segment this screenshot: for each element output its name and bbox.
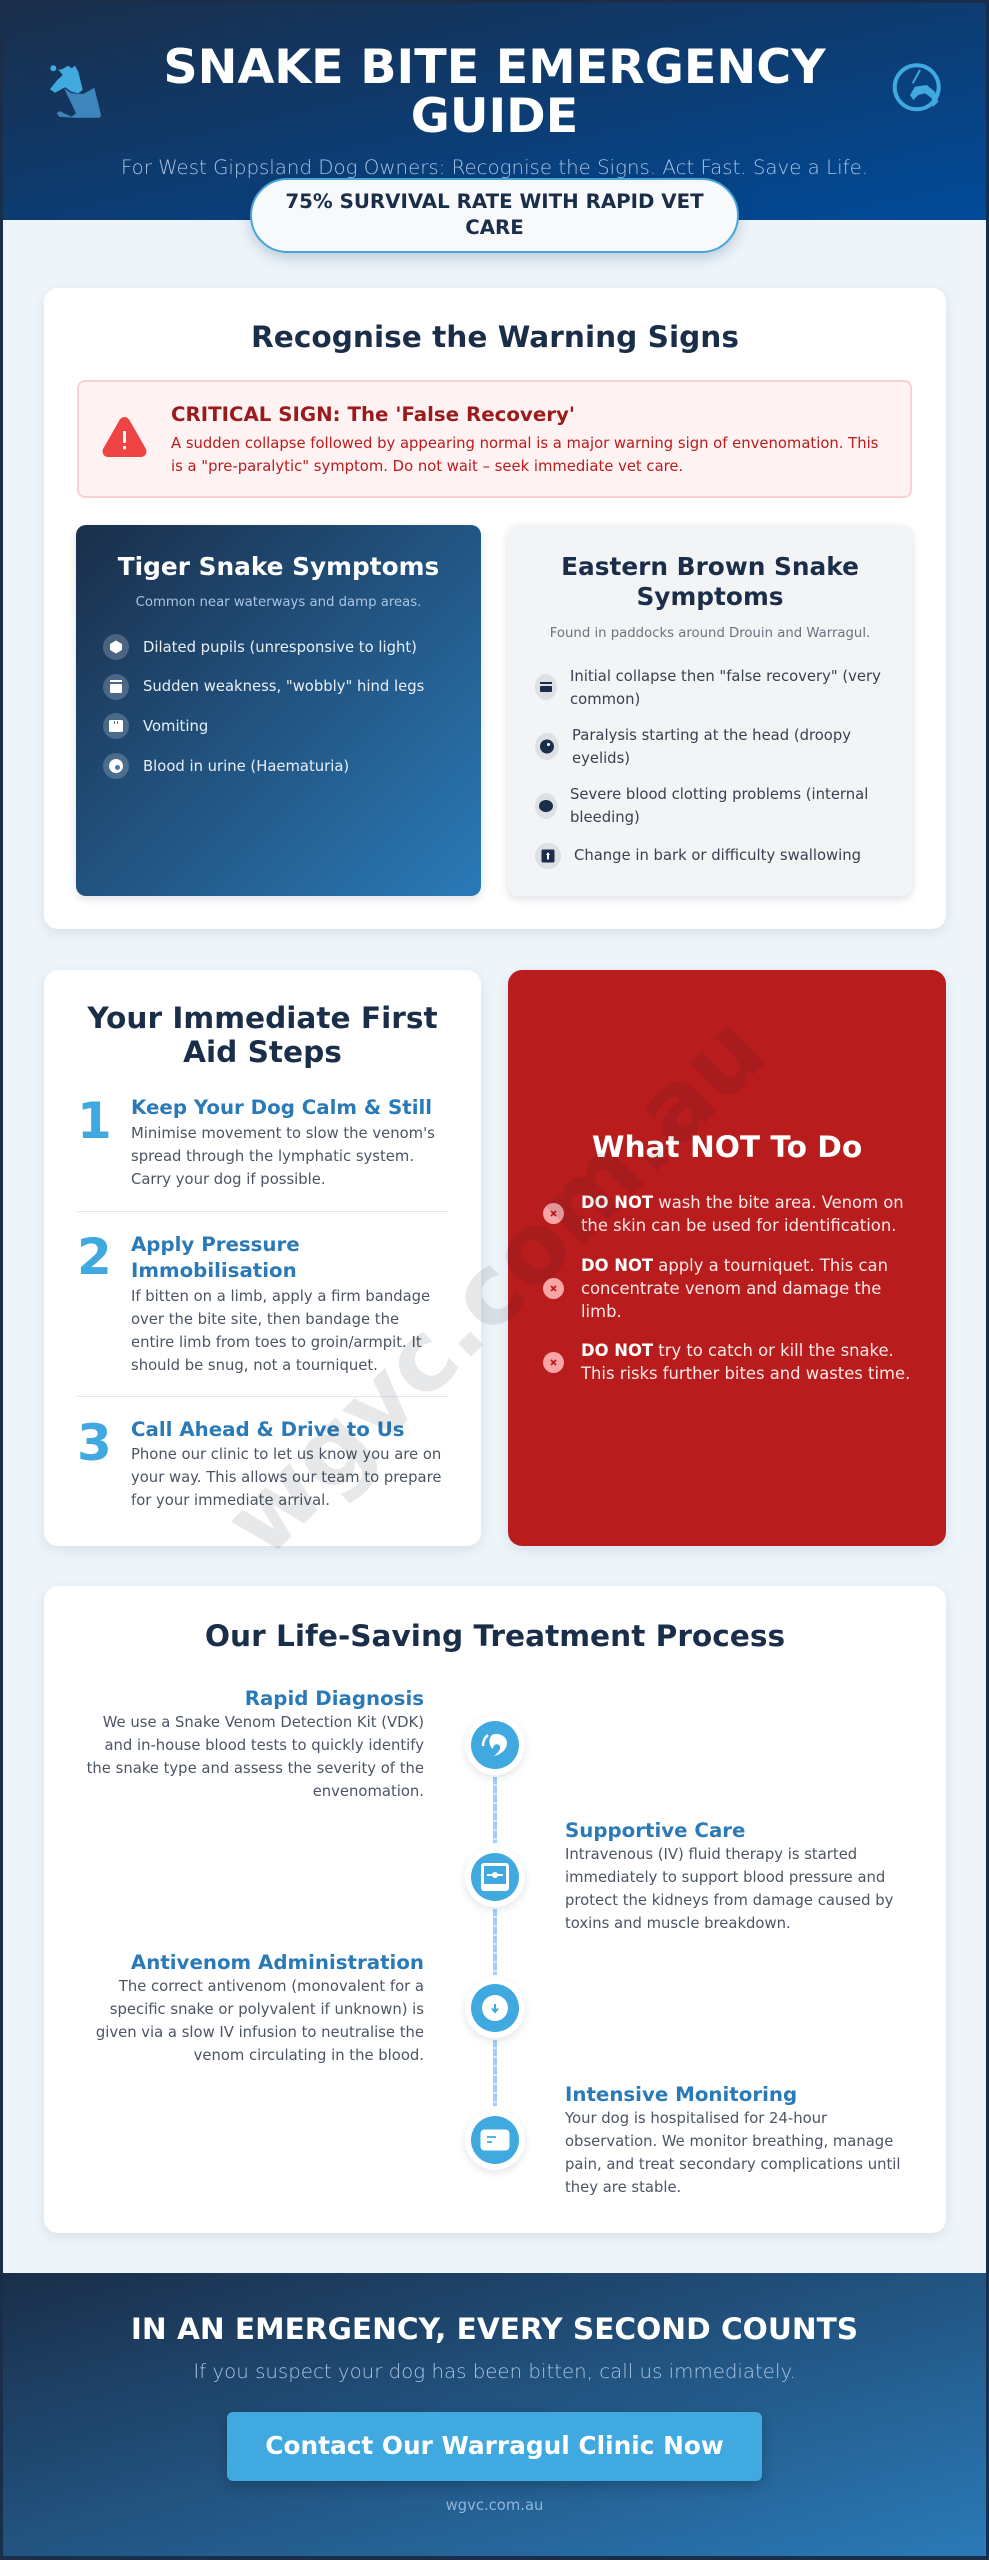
warning 2 text: concentrate venom and damage the [581, 1278, 881, 1298]
brown heading [561, 552, 859, 611]
step 3 text: Phone our clinic to let us know you are on [131, 1446, 441, 1463]
symptom text: clotting: Severe blood clotting problems (internal [570, 786, 868, 803]
rapid diagnosis text: the snake type and assess the severity of the [87, 1760, 424, 1777]
step: rapid diagnosis [87, 1687, 424, 1800]
heading: first aid: Your Immediate First [87, 1001, 438, 1035]
website: wgvc.com.au [446, 2497, 543, 2514]
main title [163, 40, 826, 144]
supportive care text [565, 1846, 893, 1932]
rapid diagnosis text [87, 1714, 424, 1800]
step 2 text: entire limb from toes to groin/armpit. It [131, 1334, 422, 1351]
step 3 heading: Call Ahead & Drive to Us [131, 1418, 405, 1441]
callout: false recovery [77, 380, 912, 498]
callout text: A sudden collapse followed by appearing normal is a major warning sign of envenomation. This [171, 434, 878, 452]
step 1 text: Carry your dog if possible. [131, 1171, 326, 1188]
antivenom text: given via a slow IV infusion to neutralise the [96, 2024, 424, 2041]
step 1 [77, 1092, 435, 1188]
page background [3, 220, 986, 2273]
antivenom text: specific snake or polyvalent if unknown) is [110, 2001, 424, 2018]
supportive care heading: Supportive Care [565, 1819, 745, 1842]
warning 3 text [580, 1340, 910, 1382]
panel: what not to do [508, 970, 946, 1546]
step number 1: 1 [77, 1092, 112, 1150]
intensive monitoring text: they are stable. [565, 2179, 681, 2196]
icon: cross 2 [543, 1278, 564, 1299]
symptom text: bark: Change in bark or difficulty swallowing [574, 847, 861, 864]
symptom icon: bark [535, 843, 561, 869]
symptom text: paralysis: Paralysis starting at the head (droopy [572, 727, 851, 744]
heading: what not to do: What NOT To Do [592, 1130, 862, 1164]
symptom text: paralysis [572, 727, 851, 767]
warning 2 text: limb. [581, 1302, 622, 1320]
symptom text: pupils: Dilated pupils (unresponsive to light) [143, 638, 417, 656]
step 2 text [131, 1288, 430, 1374]
main title: SNAKE BITE EMERGENCY [163, 40, 826, 95]
step 1 heading: Keep Your Dog Calm & Still [131, 1096, 432, 1118]
symptom text: collapse [570, 668, 881, 708]
icon: dog [50, 65, 101, 118]
step 1 text [131, 1125, 435, 1188]
intensive monitoring heading: Intensive Monitoring [565, 2083, 797, 2106]
callout title: CRITICAL SIGN: The 'False Recovery' [171, 403, 575, 426]
supportive care text: immediately to support blood pressure and [565, 1869, 885, 1886]
symptom text: clotting: bleeding) [570, 809, 640, 826]
symptom text: vomiting: Vomiting [143, 718, 208, 735]
warning 2 text [581, 1256, 888, 1320]
intensive monitoring text: observation. We monitor breathing, manage [565, 2133, 893, 2150]
rapid diagnosis text: envenomation. [313, 1783, 424, 1800]
supportive care text: toxins and muscle breakdown. [565, 1915, 791, 1932]
intensive monitoring text: Your dog is hospitalised for 24-hour [565, 2110, 827, 2127]
rapid diagnosis heading: Rapid Diagnosis [245, 1687, 424, 1710]
symptom text: clotting [570, 786, 868, 826]
step number 3: 3 [77, 1414, 112, 1472]
panel: first aid steps [44, 970, 481, 1546]
warning 1 text [581, 1192, 904, 1234]
warning 3 text: This risks further bites and wastes time. [581, 1364, 910, 1382]
step: intensive monitoring [565, 2083, 900, 2196]
callout text: is a "pre-paralytic" symptom. Do not wait – seek immediate vet care. [171, 458, 683, 474]
heading: first aid [87, 1001, 438, 1068]
step 2 heading: Immobilisation [131, 1259, 297, 1282]
intensive monitoring text: pain, and treat secondary complications until [565, 2156, 900, 2173]
footer text: If you suspect your dog has been bitten, call us immediately. [193, 2360, 796, 2383]
step 3 text: your way. This allows our team to prepare [131, 1469, 441, 1486]
panel: tiger snake [76, 525, 481, 896]
symptom icon: pupils [103, 634, 129, 660]
contact button: Contact Our Warragul Clinic Now [265, 2431, 724, 2460]
step number 2: 2 [77, 1228, 112, 1286]
intensive monitoring text [565, 2110, 900, 2196]
heading: treatment: Our Life-Saving Treatment Process [205, 1619, 785, 1653]
icon: cross 3 [543, 1352, 564, 1373]
tiger habitat: Common near waterways and damp areas. [136, 595, 421, 610]
warning 1 text: DO NOT wash the bite area. Venom on [581, 1192, 904, 1212]
heading: first aid: Aid Steps [183, 1034, 342, 1068]
symptom icon: blood [103, 753, 129, 779]
warning 3 text: DO NOT try to catch or kill the snake. [581, 1340, 894, 1360]
step: supportive care [565, 1819, 893, 1932]
step 2 heading: Apply Pressure [131, 1233, 300, 1256]
supportive care text: protect the kidneys from damage caused by [565, 1892, 893, 1909]
panel: treatment process [44, 1586, 946, 2233]
footer heading: IN AN EMERGENCY, EVERY SECOND COUNTS [131, 2312, 858, 2346]
panel: eastern brown snake [508, 525, 912, 896]
warning 1 text: the skin can be used for identification. [581, 1216, 896, 1234]
callout text [171, 434, 878, 474]
step 2 [77, 1228, 430, 1374]
footer call to action [3, 2273, 986, 2556]
icon: cross 1 [543, 1203, 564, 1224]
header banner [3, 3, 986, 220]
panel: warning signs [44, 288, 946, 929]
icon: warning triangle [102, 417, 146, 457]
step 3 [77, 1414, 441, 1509]
symptom icon: paralysis [535, 733, 559, 760]
symptom text: collapse: common) [570, 691, 640, 708]
step 3 text: for your immediate arrival. [131, 1492, 330, 1509]
watermark: wgvc.com.au [203, 994, 787, 1578]
step 1 text: spread through the lymphatic system. [131, 1148, 414, 1165]
brown heading: Eastern Brown Snake [561, 552, 859, 581]
icon: monitoring [465, 2110, 525, 2170]
symptom icon: collapse [535, 674, 557, 700]
heading: warning signs: Recognise the Warning Signs [251, 320, 739, 354]
step 2 heading [131, 1233, 300, 1282]
icon: iv fluid [465, 1847, 525, 1907]
antivenom heading: Antivenom Administration [131, 1951, 424, 1974]
contact button [227, 2412, 762, 2481]
step 2 text: should be snug, not a tourniquet. [131, 1357, 378, 1374]
survival rate pill: CARE [465, 216, 524, 239]
brown heading: Symptoms [636, 582, 784, 611]
symptom icon: vomiting [103, 713, 129, 739]
step 1 text: Minimise movement to slow the venom's [131, 1125, 435, 1142]
antivenom text [96, 1978, 424, 2064]
rapid diagnosis text: and in-house blood tests to quickly identify [104, 1737, 424, 1754]
main title: GUIDE [411, 89, 578, 144]
antivenom text: venom circulating in the blood. [194, 2047, 424, 2064]
subtitle: For West Gippsland Dog Owners: Recognise the Signs. Act Fast. Save a Life. [121, 156, 868, 179]
symptom text: weakness: Sudden weakness, "wobbly" hind legs [143, 678, 424, 695]
antivenom text: The correct antivenom (monovalent for a [119, 1978, 424, 1995]
brown habitat: Found in paddocks around Drouin and Warragul. [550, 626, 870, 641]
symptom icon: clotting [535, 793, 557, 819]
survival rate pill [250, 178, 739, 253]
supportive care text: Intravenous (IV) fluid therapy is started [565, 1846, 857, 1863]
symptom text: blood: Blood in urine (Haematuria) [143, 758, 349, 774]
icon: diagnosis [465, 1715, 525, 1775]
step 2 text: over the bite site, then bandage the [131, 1311, 399, 1328]
icon: infusion [465, 1978, 525, 2038]
symptom text: collapse: Initial collapse then "false recovery" (very [570, 668, 881, 685]
step 2 text: If bitten on a limb, apply a firm bandage [131, 1288, 430, 1305]
symptom icon: weakness [103, 674, 129, 700]
step 3 text [131, 1446, 441, 1509]
rapid diagnosis text: We use a Snake Venom Detection Kit (VDK) [103, 1714, 424, 1731]
icon: snake in circle [892, 63, 941, 112]
symptom text: paralysis: eyelids) [572, 750, 630, 767]
step: antivenom [96, 1951, 424, 2064]
tiger heading: Tiger Snake Symptoms [118, 552, 439, 581]
warning 2 text: DO NOT apply a tourniquet. This can [581, 1256, 888, 1274]
survival rate pill: 75% SURVIVAL RATE WITH RAPID VET [285, 190, 704, 213]
